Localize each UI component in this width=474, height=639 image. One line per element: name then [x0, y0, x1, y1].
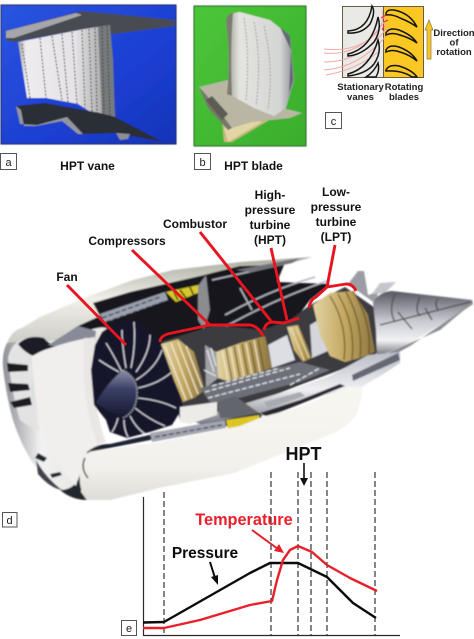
- fan nose cone: [96, 370, 137, 418]
- text: direction of rotation: Direction: [433, 28, 474, 39]
- lower nacelle cowl: [80, 387, 362, 500]
- first compressor stage: [161, 339, 205, 402]
- text: HPT: HPT: [286, 444, 322, 464]
- engine label: High-pressure turbine: pressure: [245, 203, 296, 217]
- nacelle upper band: [7, 257, 312, 350]
- text: stationary vanes: vanes: [347, 92, 374, 103]
- tail cone: [373, 291, 473, 357]
- label a: a: [5, 157, 12, 169]
- combustor silver: [268, 335, 295, 368]
- label d: d: [6, 515, 13, 527]
- label e: [122, 620, 136, 636]
- inlet lip: [3, 328, 111, 500]
- text: Pressure: Pressure: [172, 545, 239, 562]
- bypass duct dark: [48, 265, 330, 360]
- blade airfoil: [226, 12, 294, 116]
- text: rotating blades: blades: [389, 92, 419, 103]
- second compressor stage: [216, 336, 272, 382]
- arrow: pressure: [210, 562, 218, 585]
- engine label: Fan: Fan: [56, 270, 78, 284]
- hot gas flow: [324, 10, 389, 75]
- engine core dark: [160, 287, 380, 420]
- nozzle duct: [190, 352, 400, 428]
- red leader lines: [67, 232, 356, 345]
- vane top platform: [5, 11, 175, 42]
- engine label: High-pressure turbine: (HPT): [254, 233, 286, 247]
- line: temperature: [143, 546, 377, 628]
- leader: fan: [67, 285, 126, 345]
- engine label: Combustor: Combustor: [163, 217, 227, 231]
- red marks: [381, 15, 388, 30]
- vane bottom platform: [16, 103, 163, 142]
- engine cutaway: [3, 232, 473, 500]
- arrow: direction of rotation: [425, 20, 433, 59]
- leader: compressors: [132, 250, 263, 342]
- stage dashed lines: [164, 472, 375, 635]
- lower bypass band: [88, 413, 262, 452]
- engine label: Low-pressure turbine: Low-: [322, 185, 350, 199]
- engine label: Low-pressure turbine: pressure: [311, 200, 362, 214]
- label c: c: [331, 116, 337, 128]
- engine label: Low-pressure turbine: (LPT): [321, 230, 351, 244]
- text: stationary vanes: Stationary: [337, 82, 384, 93]
- chart: pressure and temperature: [143, 444, 400, 636]
- label d: [2, 512, 17, 527]
- inlet lower marks: [35, 453, 90, 500]
- leader: HPT: [271, 248, 287, 320]
- caption: HPT blade: HPT blade: [224, 159, 283, 173]
- fan disk: [91, 320, 183, 438]
- chart axes: [144, 497, 400, 636]
- text: direction of rotation: of: [450, 38, 459, 48]
- yellow bypass segment: [226, 415, 261, 429]
- photo: HPT blade: [194, 6, 306, 146]
- leader: combustor: [200, 232, 299, 330]
- label b: b: [199, 157, 206, 169]
- inlet dark inner lip: [8, 338, 48, 430]
- photo: HPT vane: [1, 5, 176, 144]
- arrow: HPT: [300, 463, 308, 486]
- LPT casing: [348, 271, 378, 304]
- fan blade highlights: [99, 322, 176, 437]
- engine label: High-pressure turbine: High-: [255, 188, 285, 202]
- text: Temperature: Temperature: [195, 511, 293, 529]
- blade airfoils: [386, 10, 417, 77]
- text: direction of rotation: rotation: [436, 47, 472, 58]
- stationary vanes panel: [342, 6, 384, 78]
- engine label: High-pressure turbine: turbine: [250, 218, 291, 232]
- vane airfoils: [348, 6, 379, 77]
- blade platform: [199, 80, 302, 128]
- engine label: Low-pressure turbine: turbine: [316, 215, 357, 229]
- blade root: [222, 114, 276, 142]
- label e: e: [126, 623, 132, 635]
- vane airfoil: [18, 25, 115, 118]
- LPT stage: [313, 291, 375, 362]
- caption: HPT vane: HPT vane: [60, 159, 115, 173]
- HPT stage: [287, 325, 312, 362]
- line: pressure: [143, 563, 376, 622]
- splitter: [180, 402, 217, 424]
- rotating blades panel: [384, 6, 424, 78]
- label c: [326, 112, 342, 128]
- inlet interior: [32, 337, 100, 486]
- diagram c: vanes and blades: [324, 6, 474, 103]
- arrow: temperature: [252, 530, 284, 553]
- text: rotating blades: Rotating: [385, 82, 423, 93]
- core lower detail: [200, 362, 330, 405]
- engine label: Compressors: Compressors: [88, 234, 166, 248]
- leader: LPT: [309, 245, 356, 308]
- label b: [194, 154, 210, 170]
- label a: [0, 154, 16, 170]
